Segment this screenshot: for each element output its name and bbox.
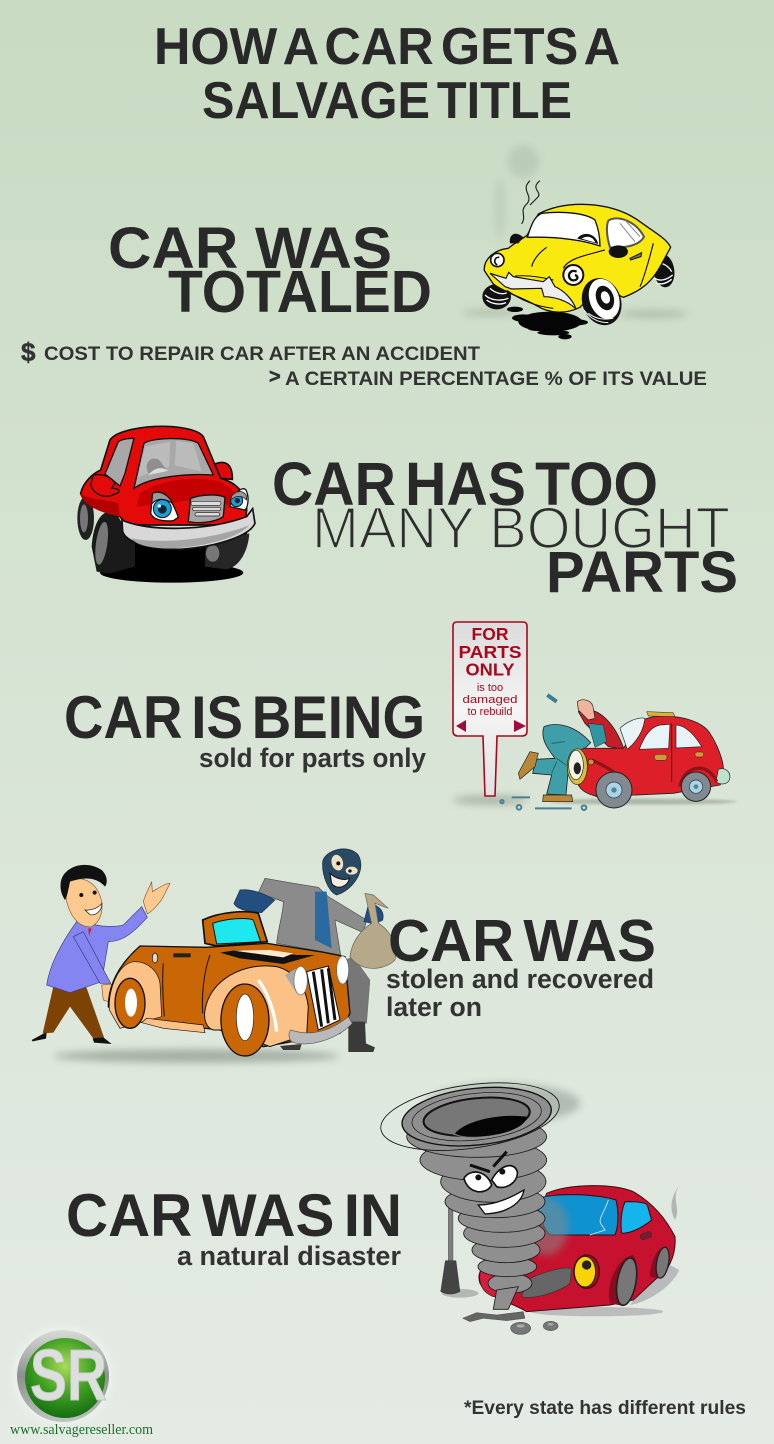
heading: car has too many bought parts bbox=[272, 450, 738, 605]
panel: too many bought parts bbox=[77, 426, 738, 605]
heading: car was stolen and recovered later on: later on bbox=[386, 992, 482, 1022]
panel: sold for parts only bbox=[64, 622, 737, 810]
icon: mechanic under the hood of a red car bbox=[500, 695, 737, 810]
icon: red cartoon car bbox=[77, 426, 255, 583]
panel: car was totaled bbox=[21, 145, 707, 390]
icon: salesman, thief and orange car bbox=[32, 849, 396, 1063]
heading: car is being sold for parts only: CAR IS BEING bbox=[64, 684, 425, 751]
text: repair cost comparison: COST TO REPAIR CAR AFTER AN ACCIDENT bbox=[44, 344, 480, 365]
heading: car is being sold for parts only: sold for parts only bbox=[199, 743, 426, 773]
title: SALVAGE TITLE bbox=[202, 72, 572, 130]
icon: for parts only sign: is too bbox=[477, 682, 503, 694]
heading: car has too many bought parts: MANY BOUGHT bbox=[312, 496, 730, 561]
footnote: *Every state has different rules bbox=[464, 1397, 746, 1419]
title: HOW A CAR GETS A bbox=[154, 18, 620, 76]
heading: car was totaled bbox=[108, 216, 432, 325]
icon: broken yellow car bbox=[462, 145, 688, 339]
heading: car was stolen and recovered later on: CAR WAS bbox=[388, 908, 656, 974]
heading: car was totaled: TOTALED bbox=[168, 259, 432, 325]
text: repair cost comparison bbox=[21, 337, 707, 390]
heading: car has too many bought parts: CAR HAS TOO bbox=[272, 450, 658, 518]
logo: salvagereseller bbox=[10, 1326, 154, 1438]
website url: www.salvagereseller.com bbox=[10, 1422, 154, 1438]
title bbox=[154, 18, 620, 130]
text: repair cost comparison: A CERTAIN PERCENTAGE % OF ITS VALUE bbox=[285, 369, 707, 390]
icon: for parts only sign: FOR bbox=[472, 624, 509, 644]
heading: car has too many bought parts: PARTS bbox=[546, 540, 738, 605]
text: repair cost comparison: > bbox=[269, 366, 281, 388]
heading: car was totaled: CAR WAS bbox=[108, 216, 392, 281]
panel: stolen and recovered bbox=[32, 849, 656, 1063]
heading: car was stolen and recovered later on: stolen and recovered bbox=[386, 964, 654, 994]
icon: for parts only sign: PARTS bbox=[458, 642, 522, 662]
logo: salvagereseller: SR bbox=[30, 1336, 107, 1416]
heading: car was in a natural disaster: a natural disaster bbox=[177, 1241, 401, 1271]
icon: for parts only sign: ONLY bbox=[466, 660, 515, 680]
text: repair cost comparison: $ bbox=[21, 337, 36, 367]
icon: for parts only sign bbox=[452, 622, 528, 805]
heading: car was stolen and recovered later on bbox=[386, 908, 656, 1022]
icon: tornado hitting a red car bbox=[376, 1073, 680, 1334]
icon: for parts only sign: to rebuild bbox=[468, 706, 512, 718]
heading: car was in a natural disaster: CAR WAS IN bbox=[66, 1182, 402, 1249]
icon: for parts only sign: damaged bbox=[462, 694, 518, 706]
panel: natural disaster bbox=[66, 1073, 680, 1334]
